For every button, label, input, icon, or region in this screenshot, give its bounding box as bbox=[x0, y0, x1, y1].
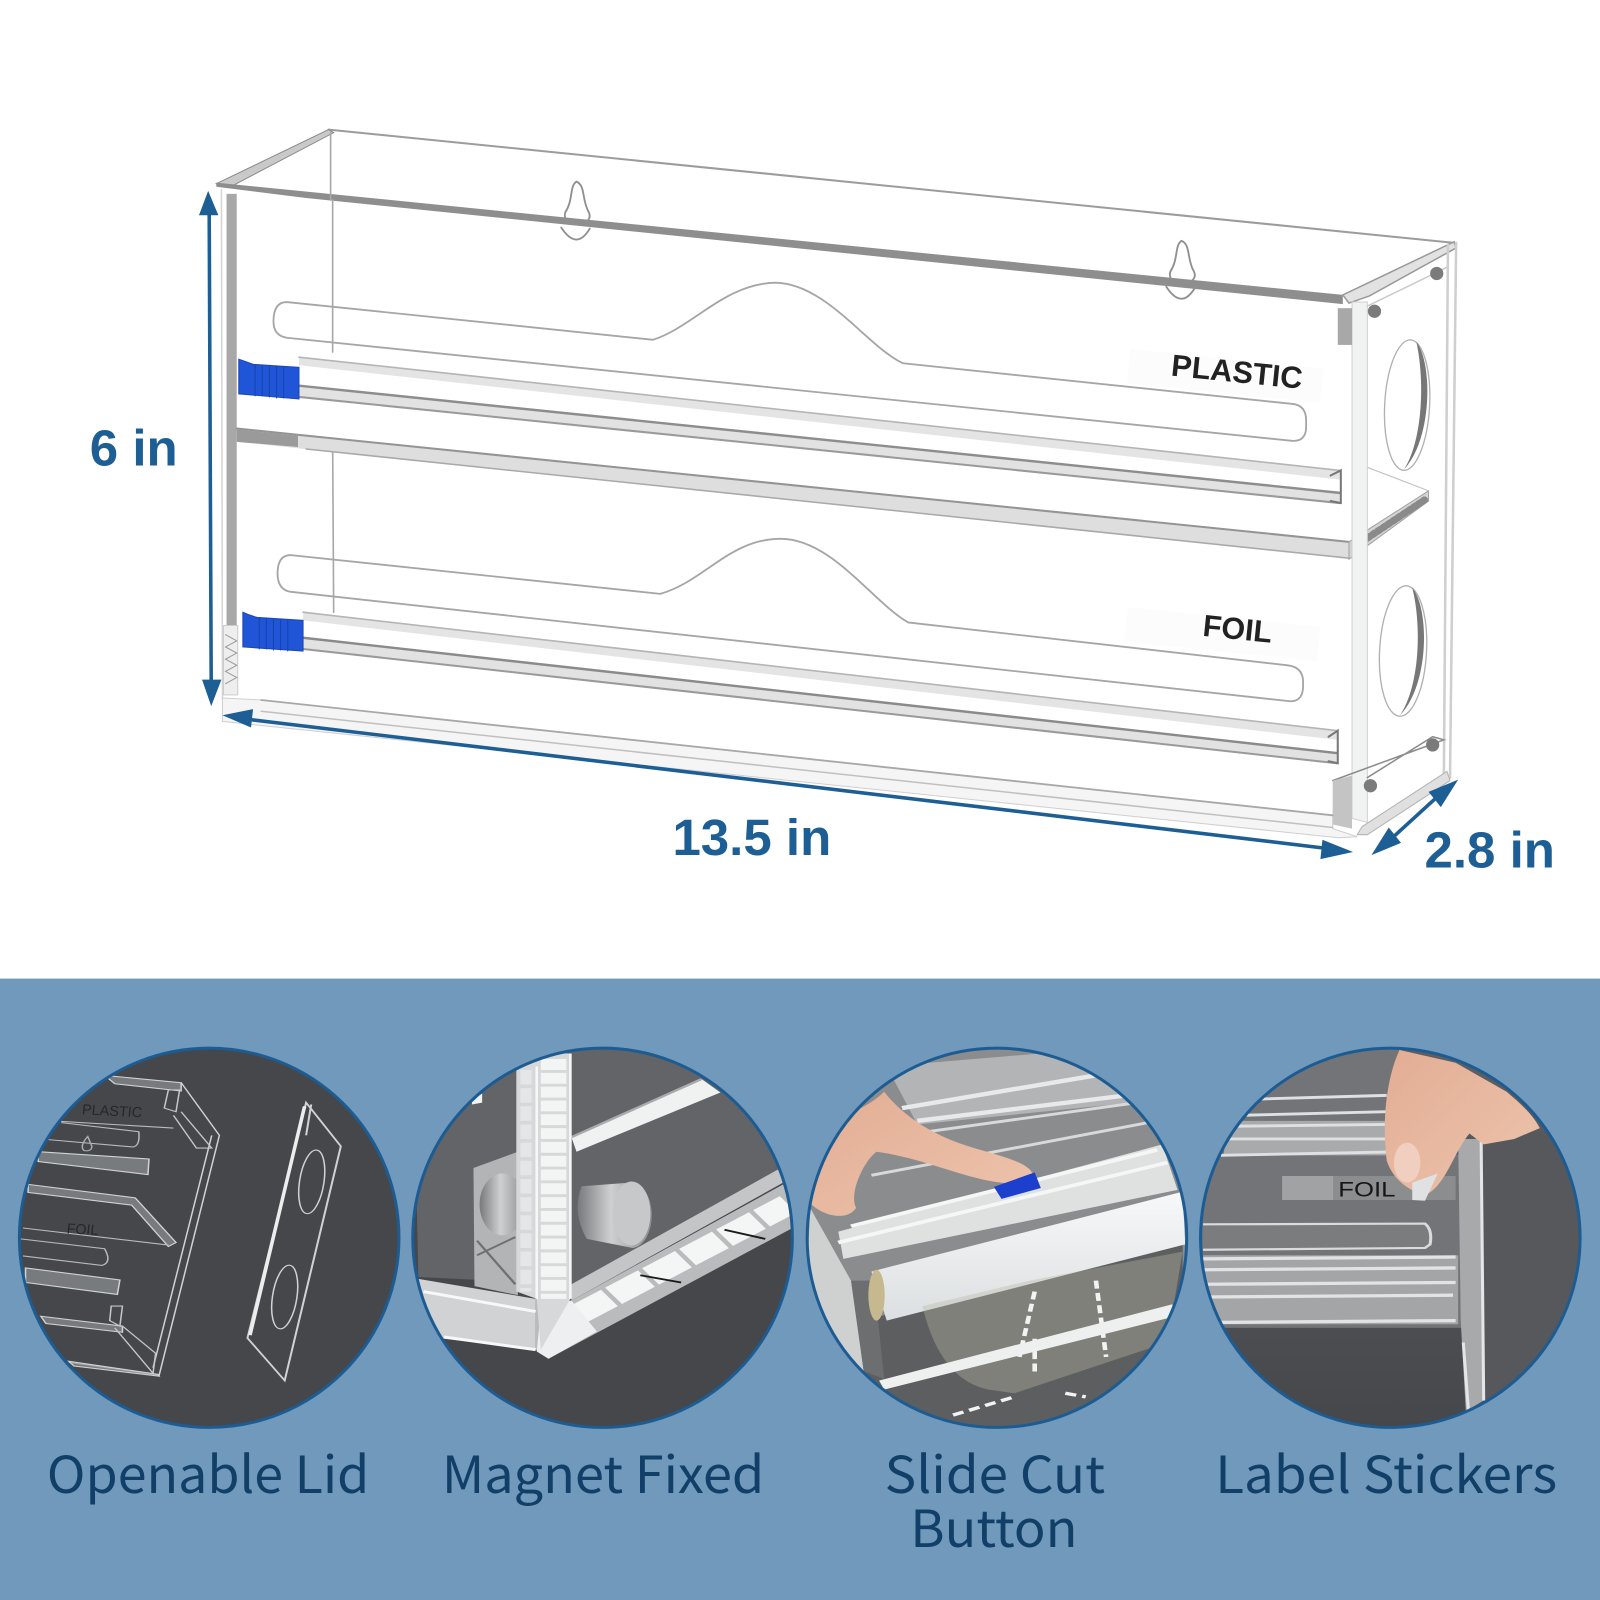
cut marks bbox=[640, 1230, 765, 1282]
dimension: height: 6 in bbox=[90, 419, 178, 476]
side hole upper bbox=[1381, 339, 1433, 471]
photo ring bbox=[807, 1048, 1187, 1427]
feature photo: openable lid bbox=[19, 1048, 399, 1427]
upper cutter rail bbox=[299, 357, 1341, 503]
lower dark area bbox=[861, 1244, 1183, 1430]
detached plate bbox=[247, 1103, 341, 1381]
caption: slide cut button: Slide Cut bbox=[885, 1434, 1105, 1508]
back rail bbox=[571, 1079, 720, 1152]
finger bbox=[808, 1092, 1034, 1216]
dark back panel bbox=[413, 1048, 796, 1284]
arrow: height bbox=[199, 191, 221, 706]
blue slider lower bbox=[243, 612, 303, 651]
lid label: FOIL: FOIL bbox=[66, 1220, 99, 1238]
panel: features band bbox=[0, 979, 1600, 1600]
corner pieces bbox=[110, 1090, 212, 1373]
acrylic post bbox=[516, 1052, 570, 1350]
right end plate bbox=[1333, 243, 1456, 835]
white base bbox=[536, 1184, 796, 1359]
label: PLASTIC: PLASTIC bbox=[1170, 349, 1304, 396]
photo ring bbox=[19, 1048, 399, 1427]
arrow: length bbox=[222, 709, 1353, 859]
front rail bbox=[571, 1168, 783, 1301]
left acrylic panel bbox=[1201, 1048, 1468, 1328]
lid frame bbox=[69, 1083, 219, 1375]
caption: slide cut button bbox=[885, 1434, 1105, 1562]
dimension: depth: 2.8 in bbox=[1424, 821, 1555, 878]
label: FOIL: FOIL bbox=[1201, 609, 1274, 650]
lower slot bbox=[278, 539, 1303, 701]
product: acrylic dispenser bbox=[216, 130, 1456, 838]
lower cutter rail bbox=[303, 612, 1338, 763]
film roll bbox=[871, 1192, 1185, 1321]
sticker label: FOIL: FOIL bbox=[1338, 1178, 1395, 1201]
keyhole bbox=[82, 1136, 92, 1151]
blue button bbox=[994, 1172, 1041, 1199]
dimension: length: 13.5 in bbox=[672, 809, 831, 866]
glass rails bbox=[26, 1075, 181, 1376]
fingernail bbox=[1394, 1143, 1420, 1183]
feature photo: magnet fixed bbox=[413, 1048, 796, 1427]
sticker strip bbox=[1333, 1176, 1456, 1200]
upper slot bbox=[273, 283, 1306, 441]
base bar bbox=[879, 1304, 1172, 1390]
divider shelf bbox=[237, 429, 1429, 559]
film sheet bbox=[922, 1252, 1183, 1393]
keyhole right bbox=[1166, 241, 1195, 299]
lid label: PLASTIC: PLASTIC bbox=[81, 1101, 143, 1121]
slots bbox=[20, 1121, 173, 1265]
upper rails bbox=[887, 1052, 1132, 1124]
magnet bbox=[578, 1181, 652, 1248]
arrow: depth bbox=[1371, 780, 1458, 855]
left post bbox=[808, 1208, 864, 1371]
caption: magnet fixed: Magnet Fixed bbox=[442, 1434, 764, 1508]
photo ring bbox=[1201, 1048, 1580, 1427]
film creases bbox=[953, 1281, 1106, 1415]
photo ring bbox=[413, 1048, 792, 1427]
upper rails bbox=[1223, 1121, 1387, 1155]
caption: label stickers: Label Stickers bbox=[1215, 1434, 1557, 1508]
side hole lower bbox=[1376, 585, 1430, 717]
cutter bar bbox=[838, 1144, 1178, 1259]
blue slider upper bbox=[239, 359, 299, 399]
side post bbox=[1458, 1139, 1484, 1411]
roll core bbox=[868, 1270, 885, 1321]
feature photo: label stickers bbox=[1201, 1048, 1586, 1427]
feature photo: slide cut button bbox=[807, 1048, 1187, 1430]
caption: openable lid: Openable Lid bbox=[47, 1434, 369, 1508]
peeled sticker bbox=[1412, 1173, 1438, 1201]
left posts bbox=[221, 133, 334, 699]
keyhole left bbox=[561, 182, 590, 240]
lower rail bbox=[1203, 1255, 1458, 1324]
slot bbox=[1203, 1224, 1431, 1250]
top rim bbox=[216, 130, 1456, 304]
bottom base bbox=[222, 698, 1357, 838]
magnet bracket bbox=[473, 1152, 518, 1295]
sticker backings bbox=[1124, 349, 1323, 661]
hand bbox=[1385, 1050, 1540, 1195]
caption: slide cut button: Button bbox=[910, 1488, 1078, 1562]
